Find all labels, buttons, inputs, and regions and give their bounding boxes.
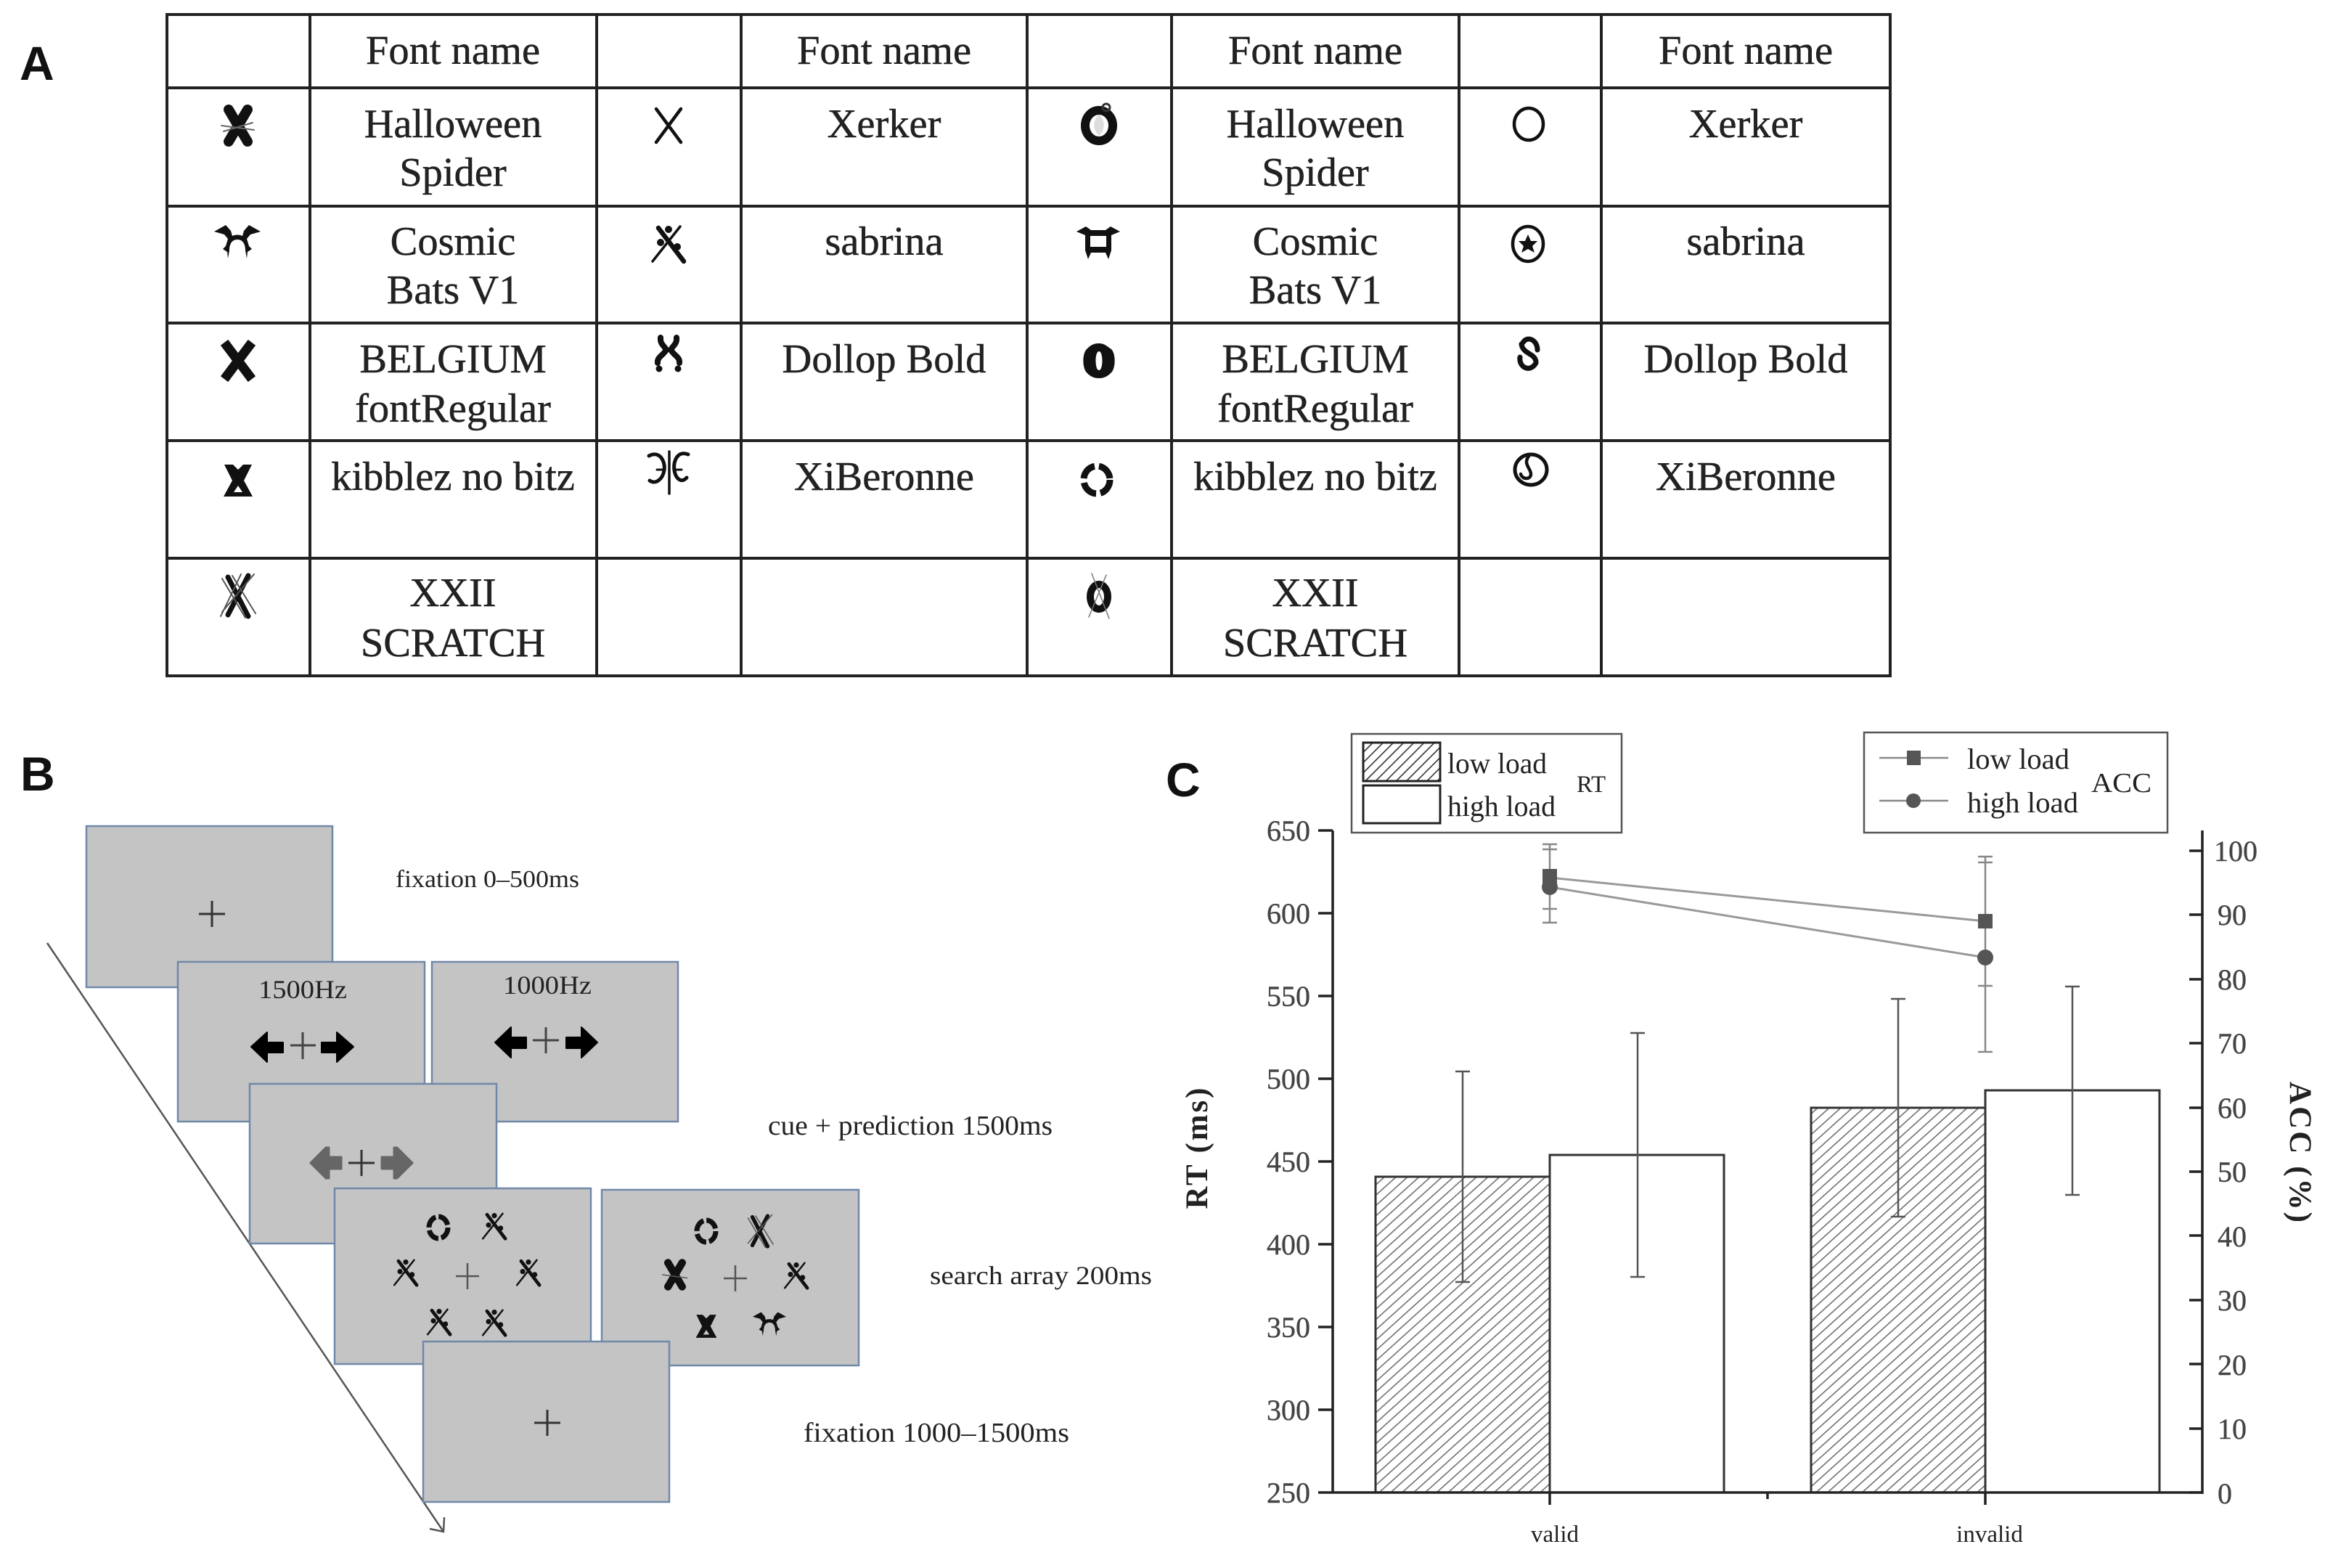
screen: search array, heterogeneous distractors	[602, 1190, 859, 1365]
column 4 font names: Xerker	[828, 102, 941, 147]
icon: sabrina X bottom left	[428, 1309, 450, 1334]
panel label A: A	[20, 36, 54, 90]
panel C: combo chart	[1180, 732, 2317, 1548]
label: search array: search array 200ms	[930, 1261, 1152, 1290]
column 2 font names: Halloween	[364, 102, 542, 147]
column 8 font names	[1644, 102, 1847, 499]
label: fixation 1000-1500ms: fixation 1000–1500ms	[804, 1418, 1069, 1448]
icon: sabrina X middle right	[517, 1259, 539, 1285]
icon: XXII Scratch X	[221, 574, 256, 618]
column 2 font names: kibblez no bitz	[331, 454, 575, 499]
panel A: font table	[167, 15, 1890, 676]
icon: target O, second array	[697, 1220, 716, 1242]
table header row: Font name	[797, 28, 971, 73]
ACC line: high load	[1542, 879, 1993, 965]
icon: Halloween Spider O	[1085, 104, 1113, 141]
icon: Cosmic Bats O	[1076, 226, 1120, 259]
screen: 1000Hz cue	[432, 962, 678, 1122]
table header row: Font name	[366, 28, 540, 73]
x axis: invalid	[1956, 1522, 2023, 1548]
legend: ACC	[1864, 732, 2167, 833]
icon: Belgium X	[227, 346, 249, 375]
column 2 font names	[331, 102, 575, 666]
RT error bars	[1455, 987, 2080, 1282]
icon: sabrina X bottom right	[483, 1310, 505, 1335]
icon: XiBeronne X	[649, 452, 688, 494]
label: fixation 0-500ms: fixation 0–500ms	[396, 866, 579, 893]
table grid	[167, 15, 1890, 676]
column 8 font names: Dollop Bold	[1644, 337, 1847, 382]
icon: Cosmic X, second array	[753, 1312, 786, 1336]
icon: sabrina O	[1513, 226, 1543, 261]
column 2 font names: SCRATCH	[361, 621, 545, 666]
left RT axis	[1267, 814, 1333, 1509]
icon: kibblez X	[224, 465, 253, 497]
icon: Halloween X, second array	[663, 1263, 687, 1286]
column 2 font names: XXII	[409, 571, 497, 616]
legend: RT: RT	[1577, 772, 1606, 798]
left RT axis: 550	[1267, 980, 1310, 1013]
icon: XXII X, second array	[748, 1215, 773, 1247]
right ACC axis: 90	[2218, 899, 2247, 931]
table header row: Font name	[1228, 28, 1402, 73]
legend: ACC: high load	[1967, 786, 2078, 819]
x axis	[1333, 1493, 2202, 1548]
right ACC axis: 100	[2214, 835, 2257, 867]
icon: Xerker X	[656, 109, 681, 142]
column 6 font names: Halloween	[1227, 102, 1404, 147]
y axis title: ACC: ACC (%)	[2283, 1082, 2317, 1222]
column 4 font names: XiBeronne	[794, 454, 974, 499]
column 6 font names: SCRATCH	[1223, 621, 1407, 666]
screen: search array, homogeneous distractors	[335, 1188, 591, 1364]
panel label C: C	[1166, 753, 1201, 807]
right ACC axis: 10	[2218, 1413, 2247, 1445]
ACC error bars	[1542, 844, 1993, 1052]
icon: XXII Scratch O	[1089, 573, 1109, 618]
icon: kibblez O	[1084, 466, 1110, 494]
legend: RT: high load	[1447, 790, 1556, 822]
icon: sabrina X, second array	[785, 1262, 807, 1288]
column 8 font names: XiBeronne	[1656, 454, 1836, 499]
left RT axis: 250	[1267, 1477, 1310, 1509]
RT bar: invalid low load	[1811, 1108, 1985, 1493]
icon: Cosmic Bats X	[214, 225, 261, 258]
right ACC axis: 80	[2218, 963, 2247, 996]
left RT axis: 350	[1267, 1311, 1310, 1344]
icon: sabrina X top right	[483, 1213, 505, 1238]
column 4 font names: sabrina	[825, 219, 944, 264]
screen: prediction	[250, 1084, 497, 1244]
column 6 font names: Bats V1	[1249, 268, 1381, 313]
right ACC axis: 20	[2218, 1349, 2247, 1381]
right ACC axis: 50	[2218, 1156, 2247, 1188]
column 6 font names: Cosmic	[1253, 219, 1378, 264]
icon: target O	[429, 1217, 448, 1238]
legend: ACC: ACC	[2091, 768, 2152, 799]
time arrow	[47, 943, 444, 1532]
column 6 font names: XXII	[1272, 571, 1359, 616]
ACC line: low load	[1542, 869, 1993, 928]
left RT axis: 450	[1267, 1146, 1310, 1178]
left RT axis: 300	[1267, 1394, 1310, 1426]
left RT axis: 650	[1267, 814, 1310, 847]
screen: 1500Hz cue	[178, 962, 425, 1122]
y axis title: RT: RT (ms)	[1180, 1087, 1214, 1209]
column 4 font names	[783, 102, 986, 499]
column 6 font names: kibblez no bitz	[1193, 454, 1437, 499]
icon: XiBeronne O	[1515, 454, 1547, 485]
table header row: Font name	[1659, 28, 1833, 73]
right ACC axis: 40	[2218, 1220, 2247, 1253]
x axis: valid	[1531, 1522, 1579, 1548]
column 8 font names: sabrina	[1686, 219, 1805, 264]
column 6 font names: BELGIUM	[1222, 337, 1409, 382]
RT bar: valid high load	[1550, 1155, 1724, 1493]
column 6 font names: Spider	[1262, 150, 1369, 195]
table header row	[366, 28, 1833, 73]
RT bar: valid low load	[1376, 1177, 1550, 1493]
column 6 font names: fontRegular	[1217, 386, 1413, 431]
RT bar: invalid high load	[1985, 1090, 2159, 1493]
panel B: task procedure	[47, 826, 1152, 1532]
column 6 font names	[1193, 102, 1437, 666]
legend: RT: low load	[1447, 747, 1547, 780]
left RT axis: 600	[1267, 897, 1310, 930]
icon: kibblez X, second array	[696, 1315, 716, 1338]
icon: Xerker O	[1514, 108, 1543, 140]
screen: 1000Hz cue: 1000Hz	[503, 971, 592, 1000]
right ACC axis: 0	[2218, 1477, 2232, 1510]
right ACC axis	[2189, 830, 2257, 1510]
column 2 font names: Cosmic	[391, 219, 515, 264]
column 2 font names: fontRegular	[355, 386, 551, 431]
icon: Belgium O	[1083, 343, 1115, 378]
left RT axis: 500	[1267, 1063, 1310, 1095]
icon: sabrina X middle left	[394, 1259, 417, 1285]
right ACC axis: 70	[2218, 1027, 2247, 1060]
label: cue and prediction: cue + prediction 1500ms	[768, 1111, 1053, 1141]
screen: initial fixation	[86, 826, 332, 987]
panel label B: B	[20, 747, 55, 801]
right ACC axis: 60	[2218, 1092, 2247, 1124]
column 4 font names: Dollop Bold	[783, 337, 986, 382]
screen: final fixation	[423, 1342, 669, 1502]
right ACC axis: 30	[2218, 1284, 2247, 1317]
legend: RT	[1352, 734, 1622, 833]
column 2 font names: BELGIUM	[359, 337, 547, 382]
icon: Dollop Bold X	[656, 338, 681, 372]
icon: sabrina X	[653, 226, 684, 261]
column 2 font names: Bats V1	[387, 268, 519, 313]
column 2 font names: Spider	[399, 150, 507, 195]
legend: ACC: low load	[1967, 743, 2069, 775]
left RT axis: 400	[1267, 1228, 1310, 1261]
column 8 font names: Xerker	[1689, 102, 1803, 147]
screen: 1500Hz cue: 1500Hz	[258, 975, 347, 1004]
icon: Dollop Bold O	[1520, 339, 1537, 368]
icon: Halloween Spider X	[221, 110, 254, 142]
